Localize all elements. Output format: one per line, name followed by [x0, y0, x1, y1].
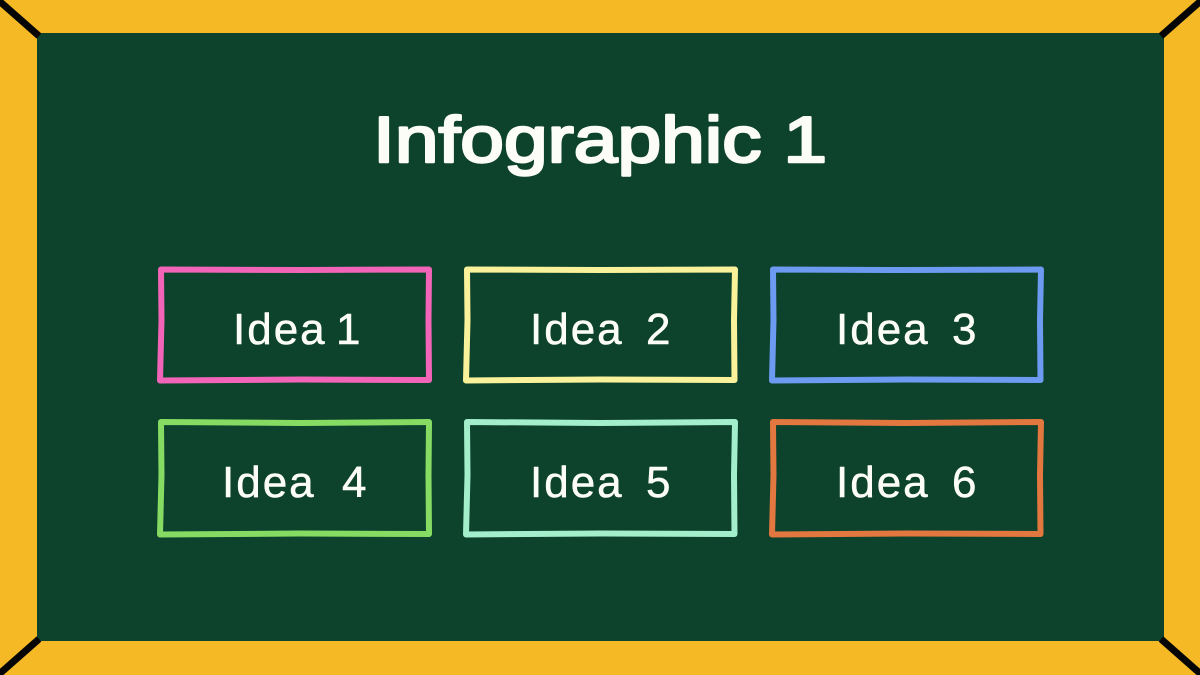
panel: idea 5: [466, 422, 735, 534]
label: idea 2: Idea: [530, 305, 624, 354]
label: idea 1: 1: [336, 305, 362, 354]
label: idea 6: 6: [952, 458, 978, 507]
panel: idea 6: [772, 422, 1041, 534]
title: Infographic 1: [373, 103, 827, 176]
label: idea 5: Idea: [530, 458, 624, 507]
panel: idea 3: [772, 270, 1041, 380]
panel: idea 2: [466, 270, 735, 380]
label: idea 4: 4: [342, 458, 368, 507]
label: idea 4: Idea: [222, 458, 316, 507]
panel: idea 4: [160, 422, 429, 534]
label: idea 3: Idea: [836, 305, 930, 354]
label: idea 2: 2: [646, 305, 672, 354]
label: idea 1: Idea: [233, 305, 327, 354]
label: idea 3: 3: [952, 305, 978, 354]
label: idea 5: 5: [646, 458, 672, 507]
label: idea 6: Idea: [836, 458, 930, 507]
panel: idea 1: [160, 270, 429, 380]
